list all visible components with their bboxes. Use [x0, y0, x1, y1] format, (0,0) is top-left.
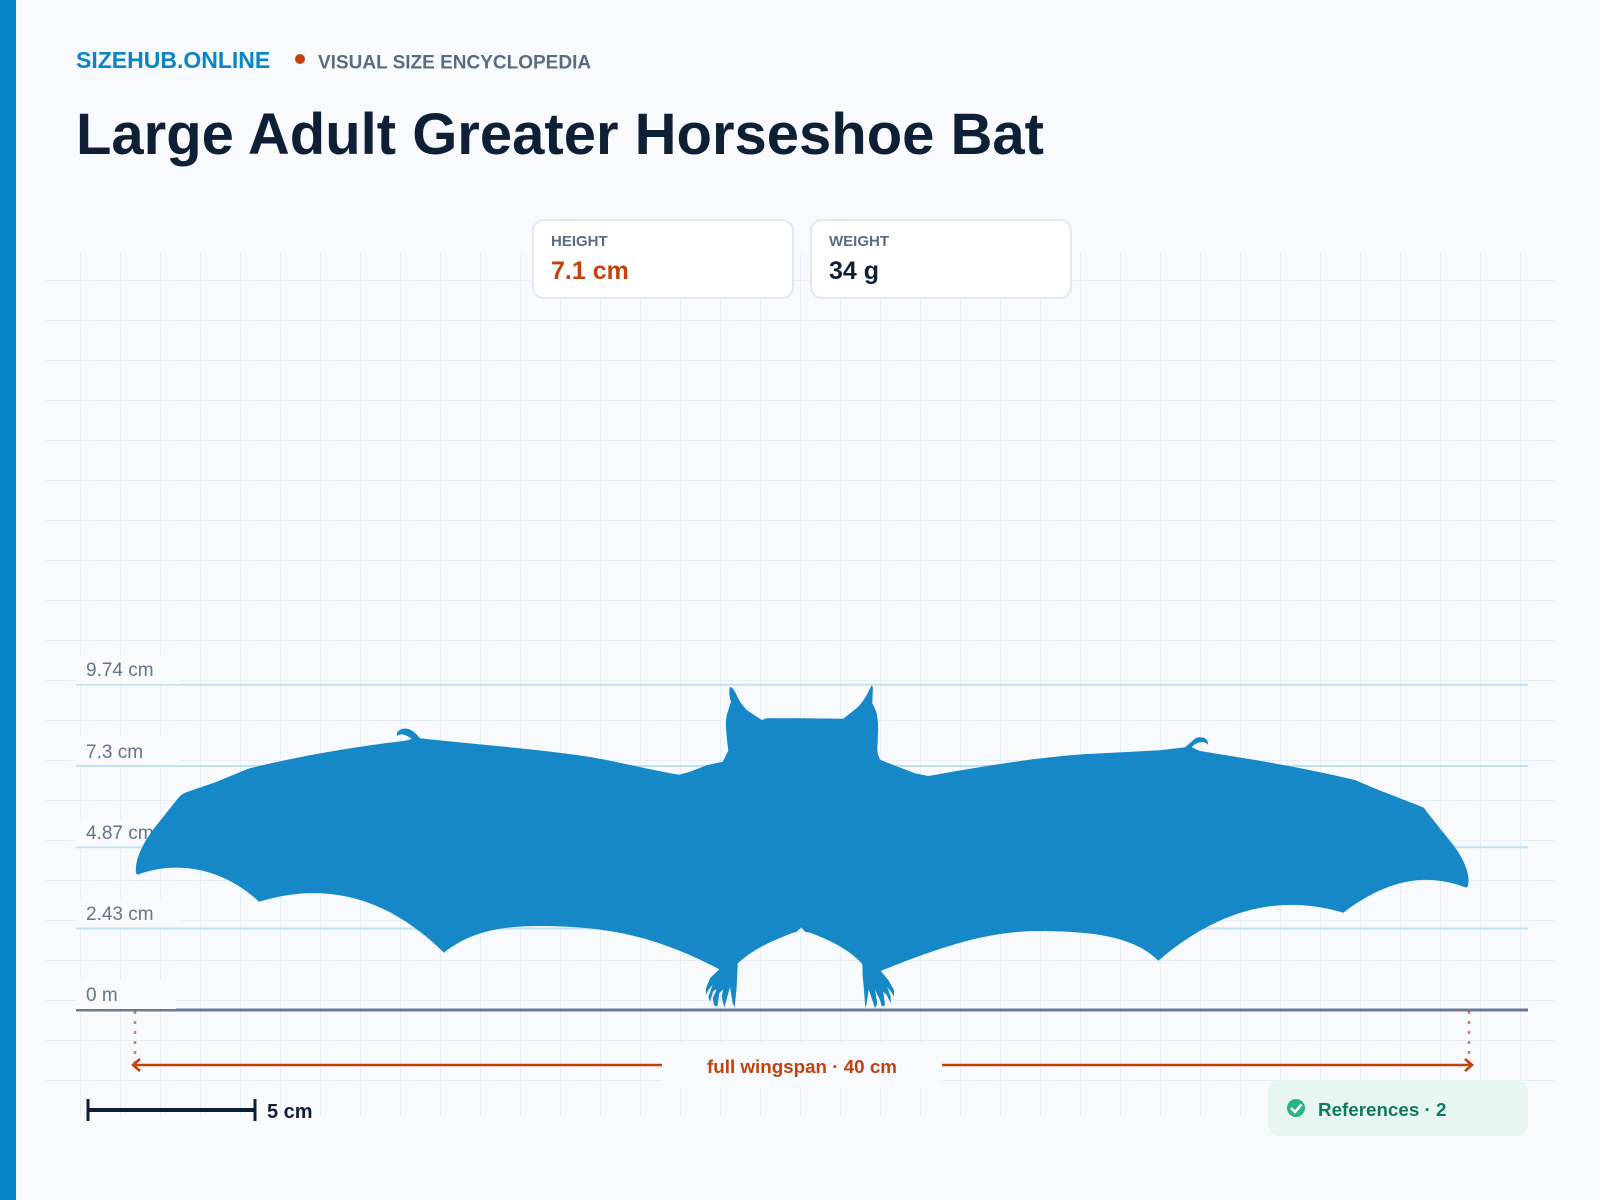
header: brand line [76, 47, 591, 74]
stat card: height [533, 220, 793, 298]
stat card: height: 7.1 cm [551, 257, 629, 285]
height ruler with labels [76, 655, 1528, 1009]
wingspan arrow [133, 1059, 1472, 1071]
references badge: References · 2 [1318, 1099, 1446, 1120]
height ruler with labels: 7.3 cm [86, 742, 143, 763]
height ruler with labels: 0 m [86, 985, 118, 1006]
stat card: weight [811, 220, 1071, 298]
scale bar [88, 1099, 313, 1123]
height ruler with labels: 2.43 cm [86, 904, 154, 925]
header: brand line: SIZEHUB.ONLINE [76, 47, 270, 73]
stat card: weight: 34 g [829, 257, 879, 285]
icon: check [1287, 1099, 1305, 1117]
stat card: weight: WEIGHT [829, 233, 889, 250]
title: Large Adult Greater Horseshoe Bat [76, 102, 1044, 167]
wingspan extent guides [135, 1011, 1469, 1065]
wingspan label: full wingspan · 40 cm [707, 1056, 897, 1077]
references badge [1268, 1080, 1528, 1136]
ground line [76, 1008, 1528, 1012]
stat card: height: HEIGHT [551, 233, 608, 250]
bat silhouette [136, 685, 1469, 1008]
height ruler with labels: 9.74 cm [86, 660, 154, 681]
scale bar: 5 cm [267, 1101, 313, 1123]
wingspan label [662, 1043, 942, 1087]
header: brand line: VISUAL SIZE ENCYCLOPEDIA [318, 52, 591, 74]
height ruler with labels: 4.87 cm [86, 823, 154, 844]
